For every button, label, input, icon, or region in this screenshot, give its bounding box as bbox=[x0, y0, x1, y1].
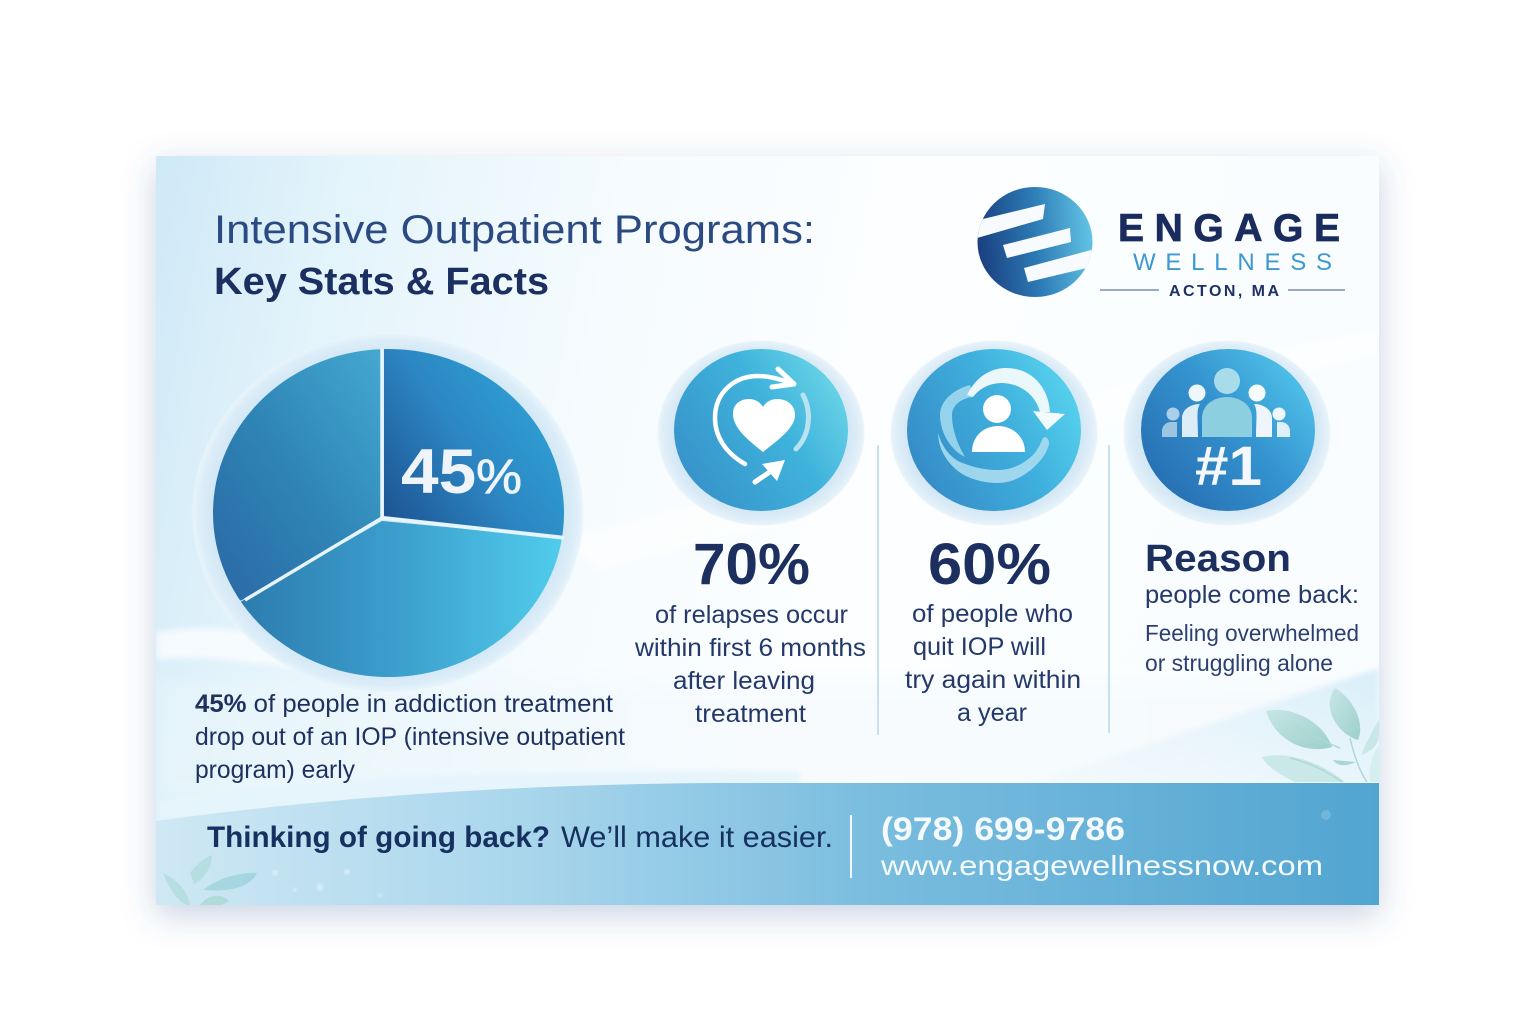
logo location: ACTON, MA bbox=[1169, 283, 1279, 300]
stat: 45% description: 45% of people in addiction treatment bbox=[195, 690, 613, 718]
heart bbox=[733, 399, 795, 452]
contact details bbox=[880, 811, 1323, 881]
stat: 70%: after leaving bbox=[673, 667, 815, 695]
slice: bottom bbox=[241, 521, 562, 677]
leaves: bottom left bbox=[163, 855, 257, 905]
call to action: We’ll make it easier. bbox=[561, 821, 833, 854]
stat: 45% description: drop out of an IOP (intensive outpatient bbox=[195, 723, 625, 751]
stat: 70%: 70% bbox=[693, 532, 810, 597]
lower crescent bbox=[938, 433, 1049, 483]
stat: 70% bbox=[634, 532, 866, 728]
stat: 45% description bbox=[195, 690, 625, 784]
slice: 45% bbox=[384, 349, 564, 536]
arrow bbox=[967, 368, 1050, 412]
pie chart bbox=[192, 333, 584, 693]
contact details: (978) 699-9786 bbox=[881, 811, 1125, 847]
badge label: #1 bbox=[1195, 434, 1262, 497]
stat: 60% bbox=[905, 532, 1081, 727]
logo wordmark: ENGAGE bbox=[1118, 207, 1340, 250]
icon: heart relapse cycle bbox=[657, 340, 865, 526]
stat: 60%: quit IOP will bbox=[913, 633, 1046, 661]
contact details: www.engagewellnessnow.com bbox=[880, 850, 1323, 881]
logo subtitle: WELLNESS bbox=[1133, 249, 1332, 276]
footer band bbox=[156, 783, 1379, 905]
stat: 45% description: program) early bbox=[195, 756, 355, 784]
stat: reason: Feeling overwhelmed bbox=[1145, 620, 1359, 646]
title: Key Stats & Facts bbox=[214, 261, 549, 303]
pie label: 45% bbox=[401, 437, 522, 507]
card background bbox=[156, 156, 1379, 905]
stat: reason: people come back: bbox=[1145, 581, 1359, 609]
upper arc bbox=[940, 385, 973, 457]
stat: 60%: 60% bbox=[928, 532, 1051, 597]
stat: 70%: of relapses occur bbox=[655, 601, 848, 629]
icon: person cycle bbox=[890, 340, 1098, 526]
stat: 60%: try again within bbox=[905, 666, 1081, 694]
pie halo bbox=[192, 333, 584, 693]
stat: reason: or struggling alone bbox=[1145, 650, 1333, 676]
call to action bbox=[207, 821, 833, 854]
title bbox=[214, 208, 815, 303]
icon: group number one bbox=[1123, 340, 1331, 526]
stat: 70%: treatment bbox=[695, 700, 806, 728]
stat: 60%: of people who bbox=[912, 600, 1073, 628]
slice: left bbox=[213, 349, 380, 600]
person bbox=[983, 395, 1011, 423]
leaves: bottom right bbox=[1262, 688, 1379, 782]
stat: reason bbox=[1145, 538, 1359, 676]
logo mark bbox=[970, 187, 1095, 297]
title: Intensive Outpatient Programs: bbox=[214, 208, 815, 252]
stat: 60%: a year bbox=[957, 699, 1027, 727]
stat: reason: Reason bbox=[1145, 538, 1291, 580]
stat: 70%: within first 6 months bbox=[634, 634, 866, 662]
logo bbox=[970, 187, 1345, 300]
call to action: Thinking of going back? bbox=[207, 821, 550, 854]
